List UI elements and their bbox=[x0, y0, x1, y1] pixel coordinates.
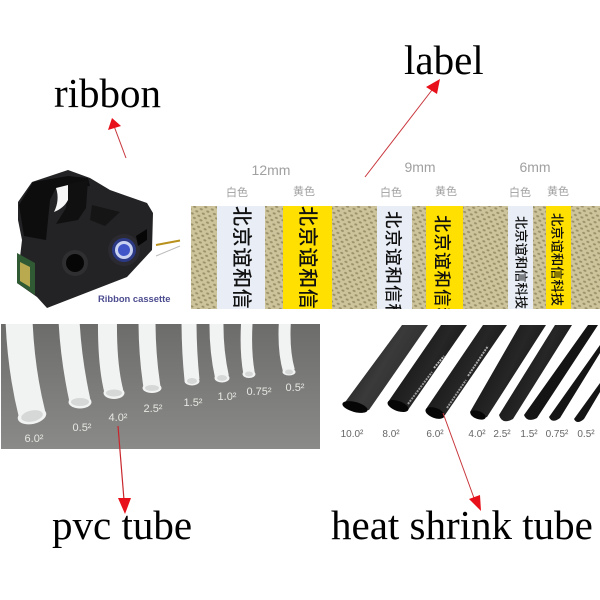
cassette window bbox=[54, 185, 68, 212]
size headings: 白色 bbox=[226, 185, 248, 199]
size headings bbox=[226, 159, 569, 199]
arrow: ribbon bbox=[108, 118, 126, 158]
printed marks bbox=[408, 372, 432, 404]
tube ends bbox=[16, 368, 296, 427]
arrow: pvc tube bbox=[118, 426, 131, 514]
size labels: 1.0² bbox=[218, 391, 237, 403]
tape background and strips: 北京谊和信科技 bbox=[550, 213, 566, 306]
tube openings bbox=[20, 370, 293, 424]
hub hole bbox=[62, 250, 88, 276]
panel: pvc tube photo bbox=[1, 320, 320, 449]
title: heat shrink tube: heat shrink tube bbox=[331, 502, 593, 548]
size labels: 0.5² bbox=[73, 422, 92, 434]
size labels: 10.0² bbox=[341, 429, 364, 440]
title: label: label bbox=[404, 37, 484, 83]
size headings: 白色 bbox=[509, 185, 531, 199]
size headings: 黄色 bbox=[293, 184, 315, 198]
tape background and strips: 北京谊和信 bbox=[296, 206, 319, 310]
size labels bbox=[25, 382, 305, 445]
tape background and strips: 北京谊和信 bbox=[230, 206, 253, 310]
panel: heat shrink tube photo bbox=[341, 325, 600, 440]
caption: Ribbon cassette bbox=[98, 293, 170, 304]
size labels bbox=[341, 429, 595, 440]
title: pvc tube: pvc tube bbox=[52, 502, 192, 548]
white tubes bbox=[19, 320, 289, 414]
cassette top details bbox=[19, 176, 90, 240]
title: ribbon: ribbon bbox=[54, 70, 161, 116]
size headings: 黄色 bbox=[547, 184, 569, 198]
panel: label samples bbox=[191, 162, 600, 309]
tape background and strips: 北京谊和信科 bbox=[432, 215, 452, 326]
size labels: 4.0² bbox=[109, 412, 128, 424]
tube ends bbox=[342, 401, 368, 413]
size labels: 2.5² bbox=[493, 429, 511, 440]
size headings: 6mm bbox=[519, 159, 551, 175]
arrow: heat shrink tube bbox=[443, 413, 481, 511]
size labels: 0.5² bbox=[577, 429, 595, 440]
ribbon strands bbox=[156, 240, 180, 245]
tape background and strips bbox=[191, 206, 600, 309]
size labels: 1.5² bbox=[184, 397, 203, 409]
black tubes bbox=[341, 325, 600, 422]
panel: ribbon cassette bbox=[17, 170, 180, 308]
size labels: 4.0² bbox=[468, 429, 486, 440]
arrow: label bbox=[365, 79, 440, 177]
size labels: 2.5² bbox=[144, 403, 163, 415]
tape background and strips: 北京谊和信科 bbox=[383, 211, 403, 322]
size headings: 12mm bbox=[252, 162, 290, 178]
tape background and strips: 北京谊和信科技 bbox=[514, 216, 530, 309]
cassette body bbox=[17, 170, 153, 308]
size labels: 0.75² bbox=[546, 429, 569, 440]
size labels: 6.0² bbox=[25, 433, 44, 445]
spool bbox=[108, 234, 140, 266]
size labels: 0.5² bbox=[286, 382, 305, 394]
chip bbox=[17, 253, 35, 295]
size headings: 9mm bbox=[404, 159, 436, 175]
size labels: 6.0² bbox=[426, 429, 444, 440]
size headings: 白色 bbox=[380, 185, 402, 199]
size labels: 8.0² bbox=[382, 429, 400, 440]
size labels: 1.5² bbox=[520, 429, 538, 440]
size headings: 黄色 bbox=[435, 184, 457, 198]
size labels: 0.75² bbox=[246, 386, 272, 398]
